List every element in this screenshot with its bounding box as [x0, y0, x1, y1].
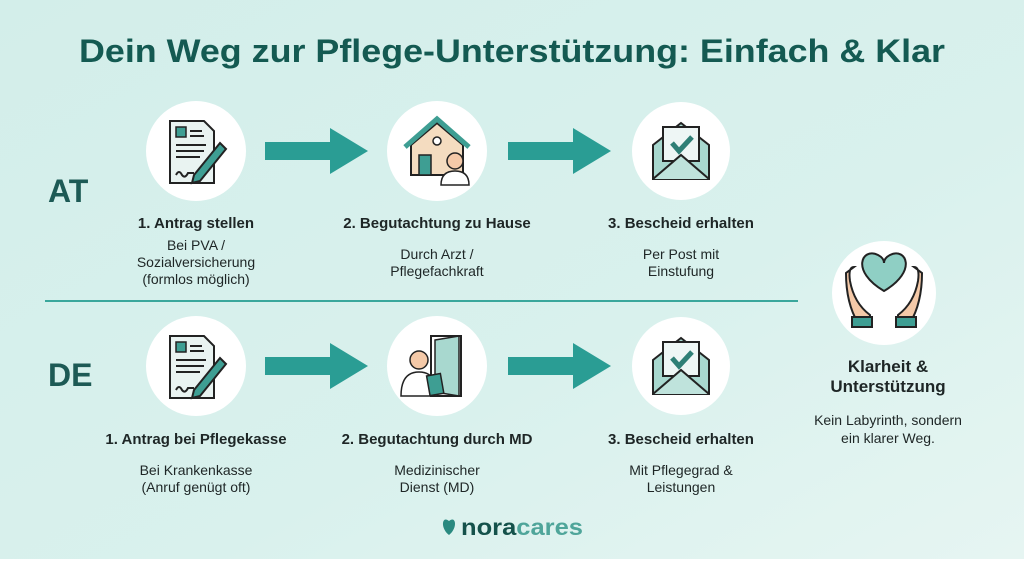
- step text DE 3: Mit Pflegegrad &: [629, 462, 733, 478]
- step text DE 1: 1. Antrag bei Pflegekasse: [105, 431, 287, 448]
- label: AT: AT: [48, 173, 89, 209]
- step text AT 1: Bei PVA /: [167, 237, 225, 253]
- step text DE 2: 2. Begutachtung durch MD: [342, 431, 533, 448]
- summary text: Klarheit &: [848, 357, 928, 376]
- arrow DE 1: [265, 343, 368, 389]
- step text DE 2: Medizinischer: [394, 462, 480, 478]
- summary text: Kein Labyrinth, sondern: [814, 412, 962, 428]
- step text AT 1: 1. Antrag stellen: [138, 215, 254, 232]
- step text AT 3: Per Post mit: [643, 246, 719, 262]
- step text AT 1: [137, 215, 255, 287]
- title: Dein Weg zur Pflege-Unterstützung: Einfach & Klar: [79, 33, 945, 69]
- icon: document AT: [146, 101, 246, 201]
- arrow DE 2: [508, 343, 611, 389]
- logo: noracares: [461, 514, 583, 540]
- icon: doctor at door: [387, 316, 487, 416]
- arrow AT 2: [508, 128, 611, 174]
- step text DE 2: Dienst (MD): [400, 479, 474, 495]
- icon: house with doctor: [387, 101, 487, 201]
- step text DE 1: (Anruf genügt oft): [142, 479, 250, 495]
- step text AT 2: Pflegefachkraft: [390, 263, 484, 279]
- step text AT 3: 3. Bescheid erhalten: [608, 215, 754, 232]
- arrow AT 1: [265, 128, 368, 174]
- step text DE 3: [608, 431, 754, 495]
- label: DE: DE: [48, 357, 92, 393]
- step text AT 3: Einstufung: [648, 263, 714, 279]
- icon: envelope DE: [632, 317, 730, 415]
- summary text: Unterstützung: [830, 377, 946, 396]
- icon: hands with heart: [832, 241, 936, 345]
- step text DE 1: [105, 431, 287, 495]
- summary text: ein klarer Weg.: [841, 430, 935, 446]
- summary text: [814, 357, 962, 446]
- step text AT 2: 2. Begutachtung zu Hause: [343, 215, 531, 232]
- icon: envelope AT: [632, 102, 730, 200]
- step text DE 1: Bei Krankenkasse: [140, 462, 253, 478]
- step text DE 3: Leistungen: [647, 479, 715, 495]
- step text AT 1: Sozialversicherung: [137, 254, 255, 270]
- step text AT 1: (formlos möglich): [142, 271, 250, 287]
- icon: document DE: [146, 316, 246, 416]
- step text AT 3: [608, 215, 754, 279]
- step text AT 2: [343, 215, 531, 279]
- step text DE 2: [342, 431, 533, 495]
- step text AT 2: Durch Arzt /: [400, 246, 474, 262]
- step text DE 3: 3. Bescheid erhalten: [608, 431, 754, 448]
